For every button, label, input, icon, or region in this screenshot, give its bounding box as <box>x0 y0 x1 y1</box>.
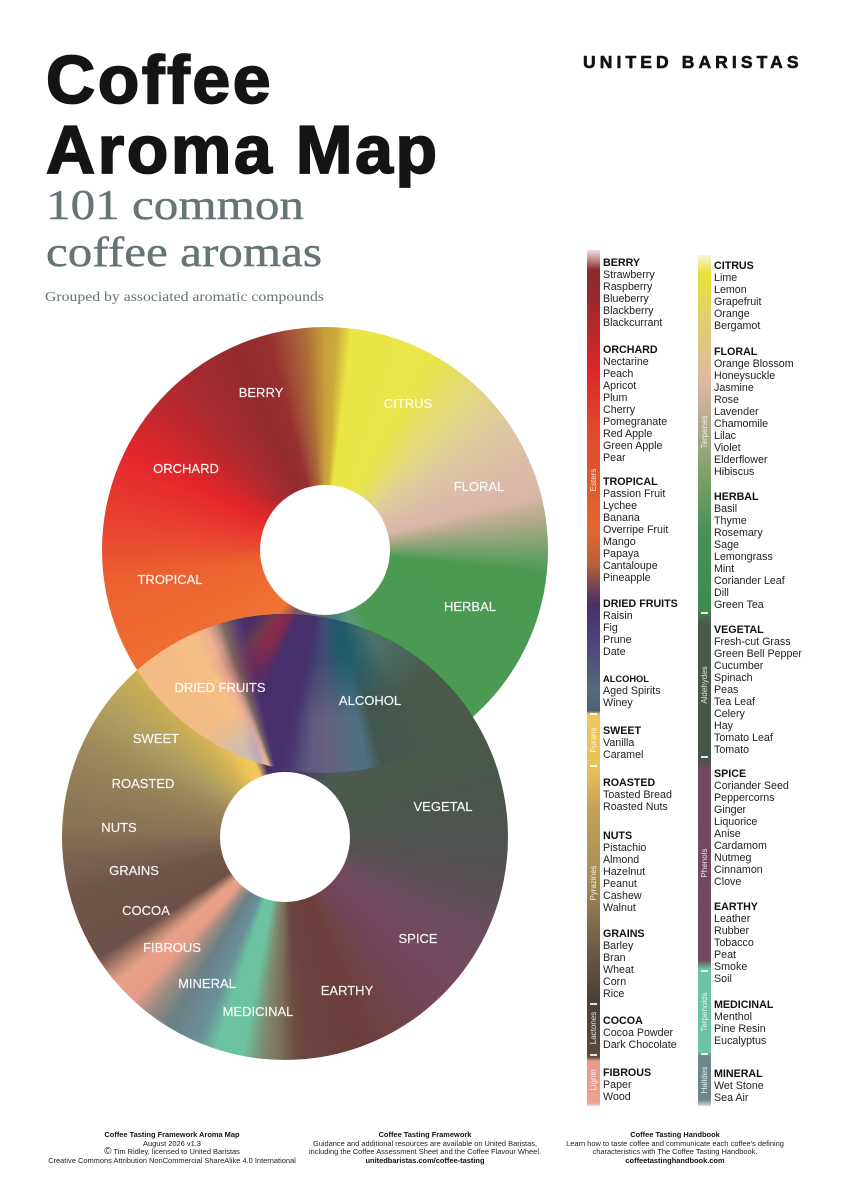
list: mineral: Wet Stone <box>714 1080 764 1092</box>
list: grains: Bran <box>603 952 626 964</box>
list: herbal: Dill <box>714 587 729 599</box>
list: earthy: Soil <box>714 973 732 985</box>
list: mineral: Sea Air <box>714 1092 748 1104</box>
footer: framework: Coffee Tasting Framework <box>379 1130 471 1139</box>
list: herbal: Mint <box>714 563 734 575</box>
list: citrus: Lemon <box>714 284 747 296</box>
tagline: Grouped by associated aromatic compounds <box>45 290 324 304</box>
list: spice: Coriander Seed <box>714 780 789 792</box>
footer: aroma map credits: © Tim Ridley, licensed to United Baristas <box>104 1146 240 1157</box>
footer: framework: including the Coffee Assessment Sheet and the Coffee Flavour Wheel. <box>309 1147 541 1156</box>
list: orchard: Peach <box>603 368 633 380</box>
list: herbal <box>714 490 785 611</box>
wheel label: grains: GRAINS <box>109 863 159 878</box>
list: grains: Barley <box>603 940 633 952</box>
list: orchard: Cherry <box>603 404 635 416</box>
list: herbal: Lemongrass <box>714 551 773 563</box>
list: berry: BERRY <box>603 256 640 268</box>
compound label: lactones: Lactones <box>588 1012 598 1044</box>
wheel label: orchard: ORCHARD <box>153 461 219 476</box>
list: nuts: Pistachio <box>603 842 646 854</box>
list: vegetal: Tea Leaf <box>714 696 755 708</box>
footer: framework <box>309 1130 541 1165</box>
wheel label: tropical: TROPICAL <box>137 572 203 587</box>
list: floral: FLORAL <box>714 346 757 358</box>
compound bar: right column <box>698 255 711 1106</box>
list: roasted: ROASTED <box>603 776 655 788</box>
wheel: top ring <box>102 327 548 773</box>
list: herbal: Basil <box>714 503 737 515</box>
list: fibrous <box>603 1066 651 1103</box>
list: orchard: Red Apple <box>603 428 652 440</box>
footer: handbook: characteristics with The Coffee Tasting Handbook. <box>593 1147 757 1156</box>
list: spice: Liquorice <box>714 816 757 828</box>
list: citrus: Grapefruit <box>714 296 762 308</box>
list: berry: Blackcurrant <box>603 317 662 329</box>
list: vegetal: Tomato Leaf <box>714 732 773 744</box>
list: spice: Cinnamon <box>714 864 763 876</box>
list: mineral: MINERAL <box>714 1068 763 1080</box>
compound bar: left column <box>587 250 600 1106</box>
list: citrus: Lime <box>714 272 737 284</box>
footer: aroma map credits: Creative Commons Attribution NonCommercial ShareAlike 4.0 International <box>48 1156 296 1165</box>
list: orchard: ORCHARD <box>603 344 658 356</box>
chart: figure-eight aroma wheel <box>62 327 548 1060</box>
list: fibrous: Paper <box>603 1079 632 1091</box>
list: tropical: Overripe Fruit <box>603 524 668 536</box>
footer: framework: Guidance and additional resources are available on United Baristas, <box>313 1139 537 1148</box>
list: orchard: Pear <box>603 452 626 464</box>
wheel label: alcohol: ALCOHOL <box>339 693 401 708</box>
list: tropical: Banana <box>603 512 640 524</box>
list: vegetal: Fresh-cut Grass <box>714 636 791 648</box>
list: vegetal: Cucumber <box>714 660 763 672</box>
list: citrus: Bergamot <box>714 320 760 332</box>
list: berry <box>603 256 662 329</box>
wheel label: fibrous: FIBROUS <box>143 940 201 955</box>
compound label: pyrazines: Pyrazines <box>588 865 598 901</box>
wheel label: medicinal: MEDICINAL <box>223 1004 293 1019</box>
hole: bottom ring <box>220 772 350 902</box>
list: tropical: Passion Fruit <box>603 488 665 500</box>
list: herbal: Thyme <box>714 515 747 527</box>
list: floral: Chamomile <box>714 418 768 430</box>
list: vegetal: Hay <box>714 720 733 732</box>
footer: handbook: coffeetastinghandbook.com <box>625 1156 725 1165</box>
list: earthy: Peat <box>714 949 736 961</box>
list: mineral <box>714 1068 764 1104</box>
list: nuts: Peanut <box>603 878 637 890</box>
wheel: bottom ring <box>62 614 508 1060</box>
list: vegetal: Celery <box>714 708 745 720</box>
footer: handbook: Learn how to taste coffee and communicate each coffee's defining <box>566 1139 784 1148</box>
list: sweet: Caramel <box>603 749 643 761</box>
list: vegetal: Green Bell Pepper <box>714 648 802 660</box>
list: herbal: Rosemary <box>714 527 763 539</box>
list: medicinal: Menthol <box>714 1011 752 1023</box>
wheel label: roasted: ROASTED <box>112 776 174 791</box>
list: floral: Violet <box>714 442 741 454</box>
list: vegetal <box>714 624 802 756</box>
list: tropical: Pineapple <box>603 572 651 584</box>
list: roasted: Roasted Nuts <box>603 801 668 813</box>
list: grains <box>603 928 645 1000</box>
list: roasted <box>603 776 672 813</box>
title: Coffee <box>46 42 273 118</box>
list: nuts: Hazelnut <box>603 866 645 878</box>
title: Aroma Map <box>46 112 440 188</box>
list: spice: Anise <box>714 828 741 840</box>
list: floral: Hibiscus <box>714 466 754 478</box>
list: grains: Rice <box>603 988 624 1000</box>
list: dried fruits <box>603 598 678 658</box>
compound label: furans: Furans <box>588 728 598 752</box>
list: herbal: HERBAL <box>714 490 759 502</box>
wheel label: vegetal: VEGETAL <box>413 799 473 814</box>
list: spice: Ginger <box>714 804 746 816</box>
list: spice: SPICE <box>714 768 746 780</box>
list: cocoa <box>603 1014 677 1051</box>
list: fibrous: FIBROUS <box>603 1066 651 1078</box>
compound label: terpenes: Terpenes <box>700 416 708 448</box>
list: tropical: Mango <box>603 536 636 548</box>
wheel label: floral: FLORAL <box>454 479 504 494</box>
compound label: phenols: Phenols <box>700 849 708 877</box>
list: cocoa: COCOA <box>603 1014 643 1026</box>
list: citrus: CITRUS <box>714 260 754 272</box>
list: citrus <box>714 260 762 332</box>
list: medicinal: Pine Resin <box>714 1023 766 1035</box>
title <box>46 42 440 188</box>
list: earthy <box>714 900 758 985</box>
list: grains: GRAINS <box>603 928 645 940</box>
compound label: halides: Halides <box>700 1067 708 1093</box>
compound label: aldehydes: Aldehydes <box>700 666 708 704</box>
subtitle: 101 common <box>46 183 304 229</box>
list: orchard: Plum <box>603 392 627 404</box>
list: dried fruits: Fig <box>603 622 618 634</box>
list: grains: Corn <box>603 976 626 988</box>
wheel label: dried fruits: DRIED FRUITS <box>174 680 266 695</box>
list: nuts: Walnut <box>603 902 636 914</box>
list: spice: Nutmeg <box>714 852 751 864</box>
list: sweet: Vanilla <box>603 737 634 749</box>
footer: handbook: Coffee Tasting Handbook <box>630 1130 720 1139</box>
list: roasted: Toasted Bread <box>603 789 672 801</box>
wheel label: berry: BERRY <box>239 385 283 400</box>
wheel label: citrus: CITRUS <box>384 396 432 411</box>
list: spice: Clove <box>714 876 741 888</box>
list: fibrous: Wood <box>603 1091 631 1103</box>
list: dried fruits: Date <box>603 646 626 658</box>
list: dried fruits: Prune <box>603 634 632 646</box>
wheel label: mineral: MINERAL <box>178 976 236 991</box>
list: berry: Blueberry <box>603 293 649 305</box>
list: citrus: Orange <box>714 308 750 320</box>
list: floral: Elderflower <box>714 454 767 466</box>
list: tropical <box>603 476 668 584</box>
list: vegetal: Spinach <box>714 672 753 684</box>
footer: aroma map credits <box>48 1130 296 1165</box>
list: orchard: Nectarine <box>603 356 649 368</box>
list: medicinal: Eucalyptus <box>714 1035 766 1047</box>
list: floral: Rose <box>714 394 739 406</box>
list: alcohol: ALCOHOL <box>603 674 649 684</box>
wheel label: earthy: EARTHY <box>321 983 373 998</box>
list: tropical: Papaya <box>603 548 639 560</box>
list: orchard <box>603 344 667 464</box>
compound label: lignin: Lignin <box>588 1069 598 1091</box>
list: nuts: NUTS <box>603 830 632 842</box>
list: nuts <box>603 830 646 914</box>
overlap: dried fruits and alcohol blend <box>137 614 473 773</box>
list: floral: Lavender <box>714 406 759 418</box>
list: berry: Strawberry <box>603 269 655 281</box>
list: spice <box>714 768 789 888</box>
list: alcohol <box>603 674 661 709</box>
list: dried fruits: DRIED FRUITS <box>603 598 678 610</box>
compound label: esters: Esters <box>588 469 598 491</box>
list: spice: Peppercorns <box>714 792 775 804</box>
list: earthy: EARTHY <box>714 900 758 912</box>
list: cocoa: Dark Chocolate <box>603 1039 677 1051</box>
list: floral <box>714 346 794 478</box>
list: vegetal: Peas <box>714 684 738 696</box>
list: orchard: Pomegranate <box>603 416 667 428</box>
list: berry: Blackberry <box>603 305 653 317</box>
list: berry: Raspberry <box>603 281 652 293</box>
list: tropical: Cantaloupe <box>603 560 658 572</box>
list: medicinal <box>714 998 774 1047</box>
list: nuts: Cashew <box>603 890 642 902</box>
list: earthy: Rubber <box>714 925 749 937</box>
list: vegetal: VEGETAL <box>714 624 764 636</box>
list: floral: Orange Blossom <box>714 358 794 370</box>
list: earthy: Smoke <box>714 961 747 973</box>
list: tropical: Lychee <box>603 500 637 512</box>
list: dried fruits: Raisin <box>603 610 633 622</box>
footer: aroma map credits: Coffee Tasting Framework Aroma Map <box>104 1130 240 1139</box>
compound label: terpenoids: Terpenoids <box>700 992 708 1032</box>
list: floral: Jasmine <box>714 382 754 394</box>
hole: top ring <box>260 485 390 615</box>
list: herbal: Sage <box>714 539 739 551</box>
list: earthy: Leather <box>714 913 750 925</box>
list: tropical: TROPICAL <box>603 476 658 488</box>
list: earthy: Tobacco <box>714 937 754 949</box>
list: orchard: Green Apple <box>603 440 662 452</box>
list: grains: Wheat <box>603 964 634 976</box>
list: nuts: Almond <box>603 854 639 866</box>
list: alcohol: Winey <box>603 697 633 709</box>
list: floral: Lilac <box>714 430 736 442</box>
wheel label: sweet: SWEET <box>133 731 179 746</box>
list: sweet: SWEET <box>603 724 641 736</box>
list: floral: Honeysuckle <box>714 370 775 382</box>
list: vegetal: Tomato <box>714 744 749 756</box>
wheel label: herbal: HERBAL <box>444 599 496 614</box>
footer: handbook <box>566 1130 784 1165</box>
list: medicinal: MEDICINAL <box>714 998 773 1010</box>
list: cocoa: Cocoa Powder <box>603 1027 673 1039</box>
subtitle: coffee aromas <box>46 230 322 276</box>
subtitle <box>46 183 322 276</box>
footer: framework: unitedbaristas.com/coffee-tasting <box>365 1156 485 1165</box>
footer: aroma map credits: August 2026 v1.3 <box>143 1139 201 1148</box>
list: alcohol: Aged Spirits <box>603 685 661 697</box>
wheel label: spice: SPICE <box>398 931 438 946</box>
wheel label: nuts: NUTS <box>101 820 137 835</box>
brand logo: UNITED BARISTAS <box>583 52 803 72</box>
list: spice: Cardamom <box>714 840 767 852</box>
wheel label: cocoa: COCOA <box>122 903 170 918</box>
list: herbal: Coriander Leaf <box>714 575 785 587</box>
list: herbal: Green Tea <box>714 599 764 611</box>
list: sweet <box>603 724 643 761</box>
list: orchard: Apricot <box>603 380 636 392</box>
